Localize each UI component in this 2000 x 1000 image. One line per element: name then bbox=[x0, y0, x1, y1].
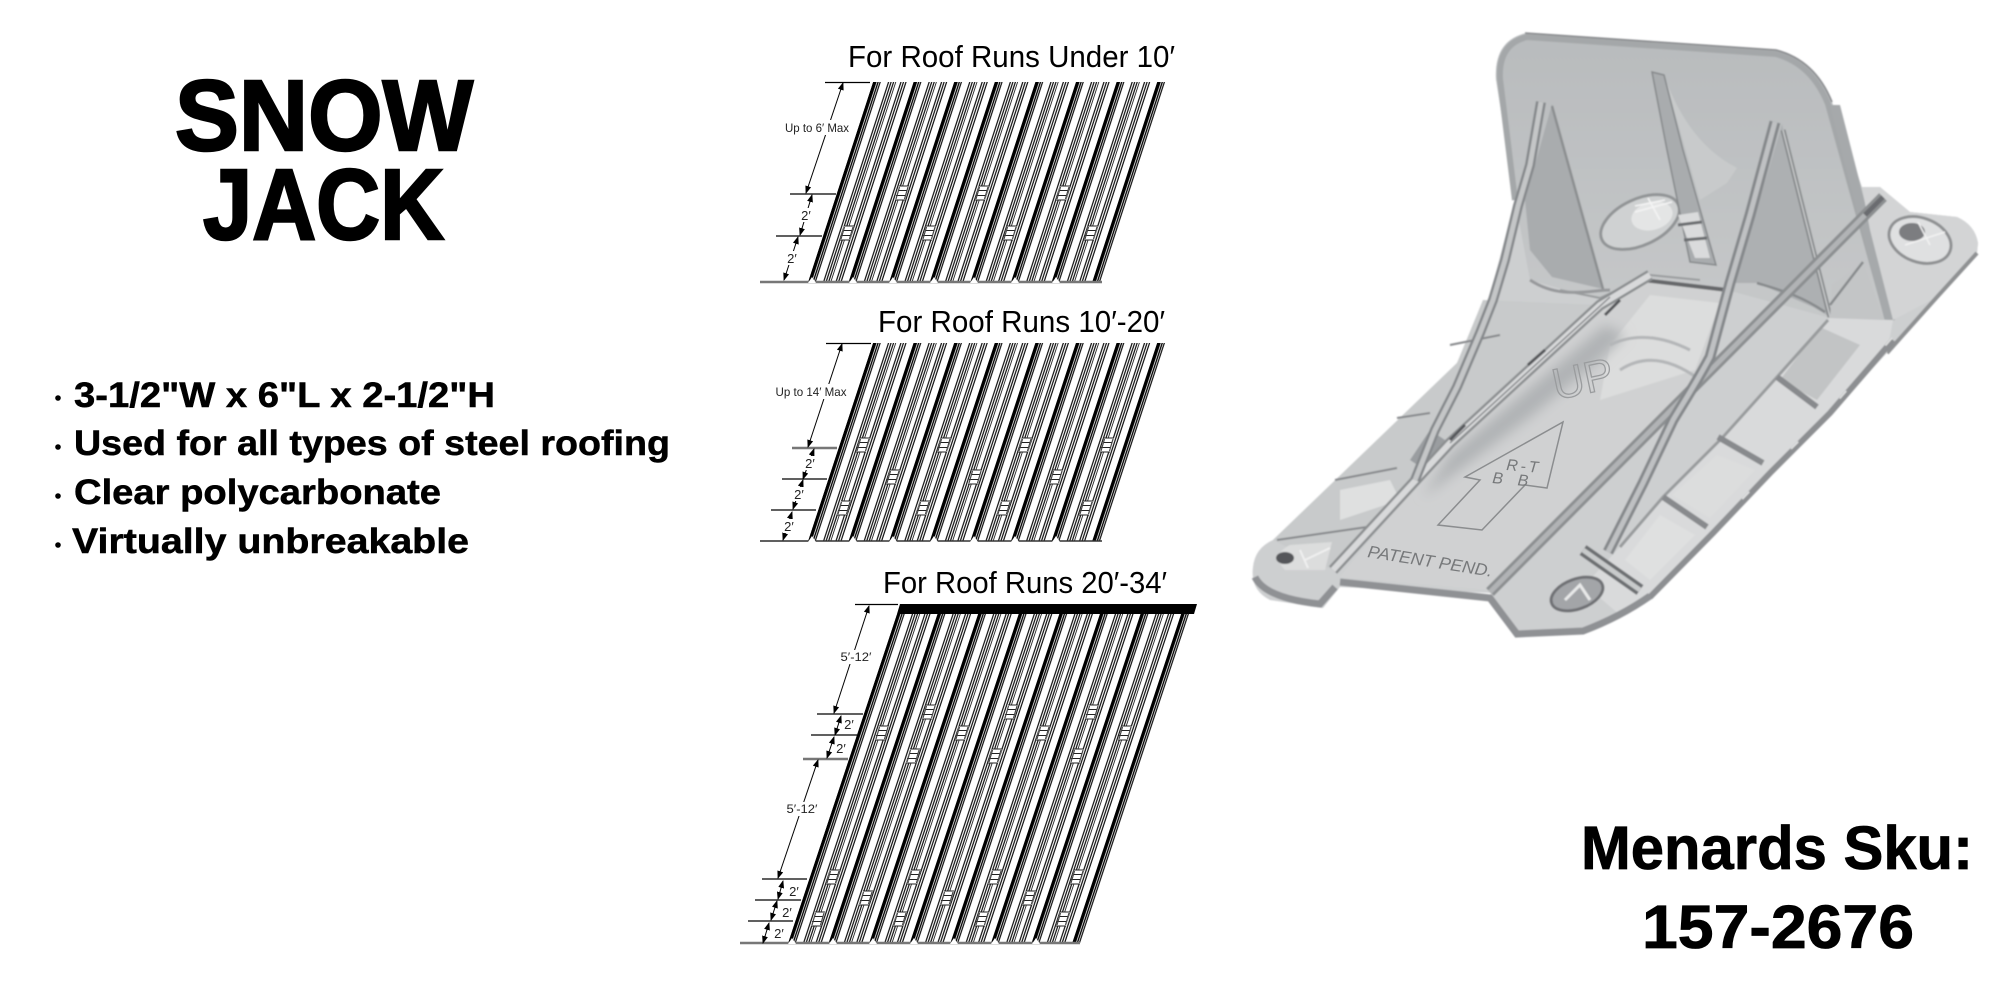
diagram: roof 20 to 34 feet: 5′-12′ bbox=[840, 650, 872, 664]
diagram: roof 10 to 20 feet: 2′ bbox=[805, 456, 815, 471]
diagram: roof 10 to 20 feet: 2′ bbox=[794, 487, 804, 502]
diagram: roof under 10 feet: 2′ bbox=[801, 208, 811, 223]
Menards SKU callout: Menards Sku: bbox=[1581, 814, 1973, 882]
moulded markings: R-T bbox=[1506, 457, 1540, 477]
lower left screw hole bbox=[1279, 542, 1332, 570]
feature bullet list: Virtually unbreakable bbox=[72, 522, 469, 561]
channel right wall bbox=[1490, 197, 1883, 592]
right fin web bbox=[1735, 124, 1830, 317]
channel left wall bbox=[1333, 275, 1650, 570]
left blade bbox=[1415, 102, 1541, 480]
diagram: roof under 10 feet: Up to 6′ Max bbox=[785, 121, 849, 135]
diagram: roof 10 to 20 feet: 2′ bbox=[784, 519, 794, 534]
back plate bbox=[1496, 33, 1893, 320]
right blade bbox=[1608, 122, 1775, 552]
diagram: roof under 10 feet bbox=[760, 82, 1170, 283]
heading: roof runs 10 to 20 feet: For Roof Runs 10′-20′ bbox=[878, 304, 1165, 339]
title: Snow Jack bbox=[175, 60, 474, 261]
moulded markings: PATENT PEND. bbox=[1366, 542, 1494, 581]
plate rib tone beneath right bbox=[1830, 105, 1895, 322]
overall silhouette bbox=[1253, 33, 1978, 637]
middle fin web bbox=[1664, 75, 1737, 200]
title: Snow Jack: JACK bbox=[203, 149, 444, 261]
diagram: roof 20 to 34 feet: 2′ bbox=[844, 717, 854, 732]
diagram: roof 20 to 34 feet: 5′-12′ bbox=[786, 802, 818, 816]
diagram: roof under 10 feet: 2′ bbox=[787, 251, 797, 266]
middle fin bbox=[1652, 72, 1716, 265]
tray cross pieces bbox=[1663, 377, 1817, 527]
back screw boss bbox=[1592, 183, 1688, 261]
back wing bbox=[1862, 187, 1978, 320]
Menards SKU callout: 157-2676 bbox=[1642, 893, 1914, 961]
Menards SKU callout bbox=[1581, 814, 1973, 961]
arrow marking moulded in base bbox=[1438, 422, 1563, 530]
feature bullet list: Used for all types of steel roofing bbox=[74, 424, 670, 463]
rear right screw hole bbox=[1882, 208, 1958, 272]
right side tray bbox=[1585, 318, 1893, 615]
feature bullet list bbox=[55, 376, 670, 561]
moulded markings bbox=[1366, 349, 1618, 581]
diagram: roof 20 to 34 feet bbox=[740, 604, 1197, 944]
diagram: roof 20 to 34 feet: 2′ bbox=[836, 741, 846, 756]
feature bullet list: Clear polycarbonate bbox=[74, 473, 441, 512]
left base panel bbox=[1273, 300, 1600, 570]
left fin web bbox=[1525, 104, 1603, 289]
moulded markings: B B bbox=[1492, 470, 1529, 490]
diagram: roof 20 to 34 feet: 2′ bbox=[789, 884, 799, 899]
channel floor bbox=[1340, 280, 1727, 590]
product photo: clear polycarbonate snow jack bbox=[1253, 33, 1978, 637]
front rim bbox=[1255, 577, 1650, 634]
heading: roof runs under 10 feet: For Roof Runs Under 10′ bbox=[848, 39, 1175, 74]
panel between fin and plate rib bbox=[1830, 262, 1884, 320]
heading: roof runs 20 to 34 feet: For Roof Runs 20′-34′ bbox=[883, 565, 1167, 600]
feature bullet list: 3-1/2"W x 6"L x 2-1/2"H bbox=[74, 376, 495, 415]
title: Snow Jack: SNOW bbox=[175, 60, 474, 172]
moulded markings: UP bbox=[1548, 349, 1618, 410]
lower right screw hole bbox=[1546, 571, 1608, 617]
floor back edge bbox=[1643, 280, 1727, 290]
diagram: roof 10 to 20 feet: Up to 14′ Max bbox=[776, 385, 846, 399]
diagram: roof 20 to 34 feet: 2′ bbox=[774, 926, 784, 941]
diagram: roof 20 to 34 feet: 2′ bbox=[782, 905, 792, 920]
diagram: roof 10 to 20 feet bbox=[760, 343, 1170, 542]
